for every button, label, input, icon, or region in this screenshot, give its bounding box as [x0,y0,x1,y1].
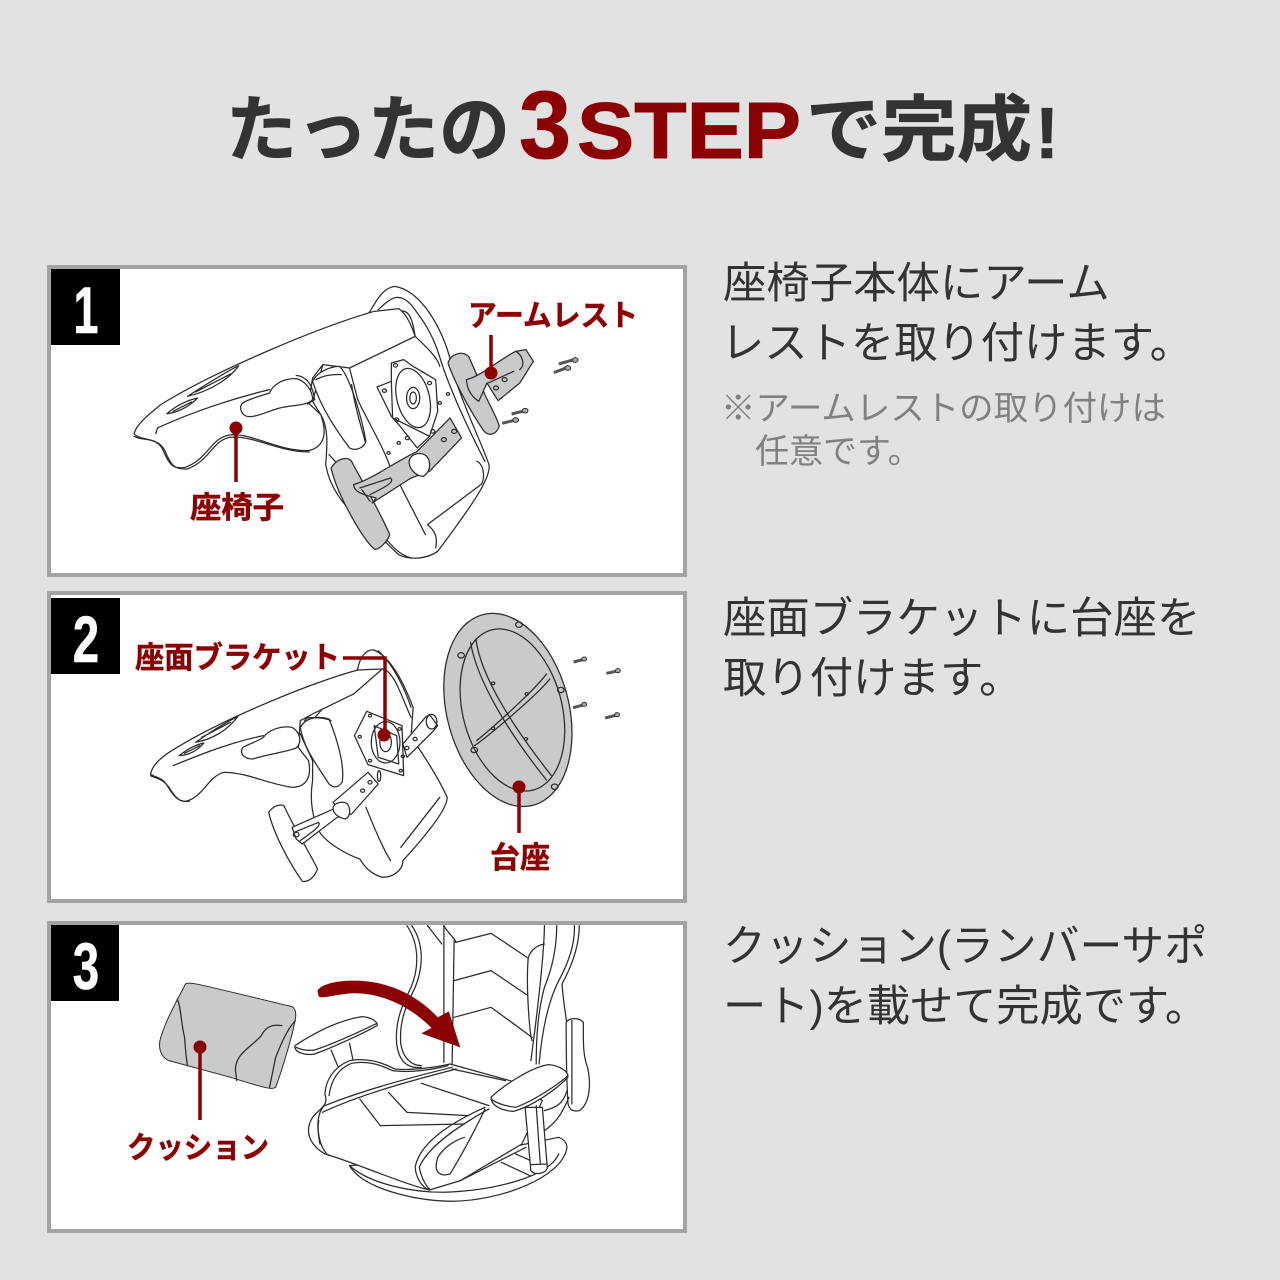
step 2 text [723,595,1200,703]
title: ! [1035,94,1059,174]
step number 3 [51,925,119,1004]
step number 1 [51,269,120,347]
step 3 text: ート)を載せて完成です。 [723,983,1208,1031]
arrow [318,981,460,1047]
step 3 text [723,923,1208,1031]
step 1 text [721,260,1193,471]
step 2 text: 座面ブラケットに台座を [723,595,1200,643]
title [226,72,1059,179]
panel: step 1 [49,267,685,575]
step 1 text: ※アームレストの取り付けは [721,390,1166,428]
step number 2 [51,598,120,677]
step number 3: 3 [73,930,99,1004]
panel: step 3 [49,923,685,1231]
step number 1: 1 [74,273,98,347]
leader: seat [230,422,242,482]
label: cushion: クッション [127,1132,269,1165]
leader: base [512,780,526,833]
label: base: 台座 [490,842,550,875]
title: 3 [519,72,571,179]
step 1 text: レストを取り付けます。 [721,320,1193,368]
label: armrest: アームレスト [468,300,638,333]
illustration: seat with armrests [134,286,578,558]
step 2 text: 取り付けます。 [723,655,1022,703]
panel: step 2 [49,593,685,901]
title: で完成 [806,91,1032,171]
leader: armrest [484,335,498,380]
label: bracket: 座面ブラケット [135,641,340,675]
label: seat: 座椅子 [190,492,284,525]
step 1 text: 座椅子本体にアーム [723,260,1110,308]
step 1 text: 任意です。 [755,433,922,471]
illustration: assembled chair [160,926,589,1201]
title: たったの [226,91,510,171]
leader: cushion [194,1040,206,1120]
step 3 text: クッション(ランバーサポ [723,923,1207,971]
leader: bracket [343,658,390,742]
step number 2: 2 [73,603,99,677]
illustration: seat with bracket [151,605,620,881]
title: STEP [577,86,801,175]
